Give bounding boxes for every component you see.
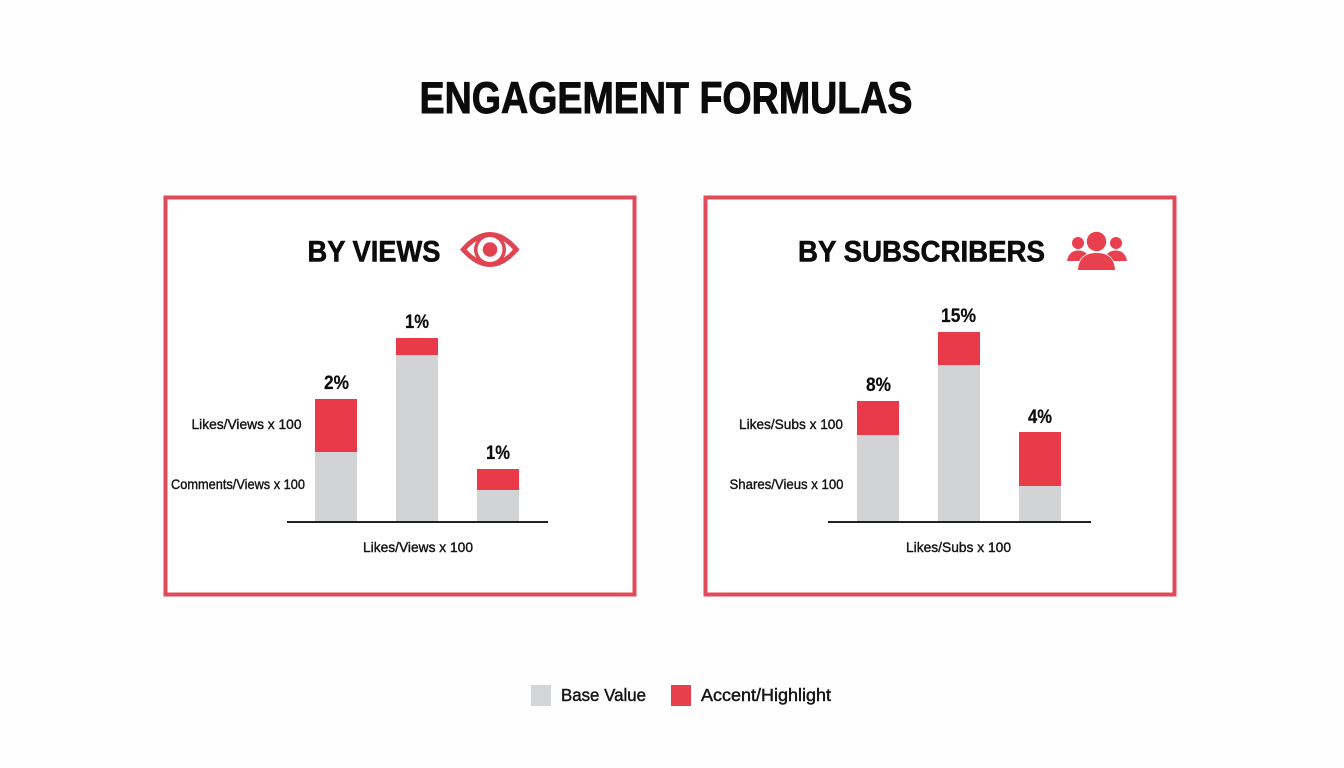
heading: by subscribers: BY SUBSCRIBERS (798, 236, 1045, 268)
axis (828, 521, 1091, 523)
icon: people (1067, 230, 1127, 270)
bar 1 (857, 401, 899, 521)
legend swatch: base value (531, 685, 551, 706)
label: shares/views: Shares/Vieus x 100 (730, 476, 844, 492)
legend label: base value: Base Value (561, 685, 646, 705)
panel: by subscribers (706, 198, 1174, 594)
label: likes/views: Likes/Views x 100 (192, 416, 302, 432)
title: ENGAGEMENT FORMULAS (420, 74, 912, 123)
icon: eye (460, 232, 520, 267)
bar 2 (938, 332, 980, 521)
bar 1 (315, 399, 357, 521)
value: 8%: 8% (866, 375, 891, 396)
value: 2%: 2% (324, 373, 349, 394)
panel: by views (166, 198, 634, 594)
legend (531, 685, 831, 706)
heading: by views: BY VIEWS (308, 236, 440, 268)
axis label: Likes/Subs x 100 (906, 539, 1011, 555)
label: comments/views: Comments/Views x 100 (171, 476, 305, 492)
bar 2 (396, 338, 438, 521)
label: likes/subs: Likes/Subs x 100 (739, 416, 843, 432)
legend label: accent: Accent/Highlight (701, 685, 831, 705)
legend swatch: accent (671, 685, 691, 706)
value: 4%: 4% (1028, 407, 1052, 428)
bar chart: by subscribers (730, 306, 1091, 555)
value: 1% right: 1% (486, 443, 510, 464)
bar 3 (477, 469, 519, 521)
axis label: Likes/Views x 100 (363, 539, 473, 555)
bar 3 (1019, 432, 1061, 521)
bar chart: by views (171, 312, 548, 555)
value: 1% middle: 1% (405, 312, 429, 333)
axis (287, 521, 548, 523)
value: 15%: 15% (941, 306, 976, 327)
